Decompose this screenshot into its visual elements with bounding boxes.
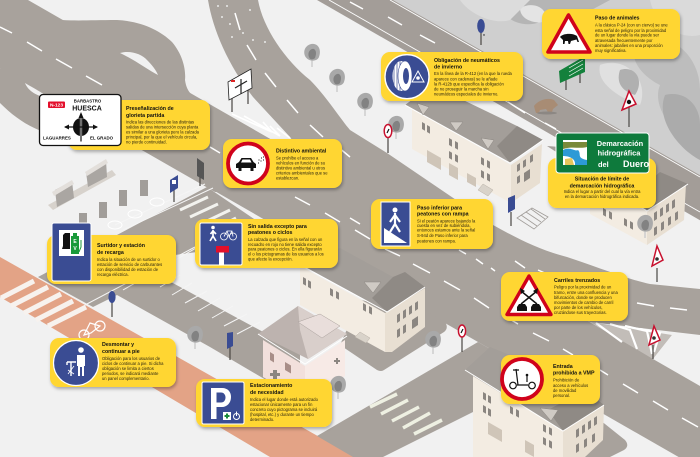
- heading and text: peatones con rampa.: [417, 238, 456, 243]
- blue rect sign: [508, 195, 515, 226]
- yellow background: [68, 100, 210, 150]
- card: preseñalización de glorieta partida: [40, 94, 210, 150]
- roundabout direction sign: N-123: [50, 102, 63, 108]
- back panel sign: [197, 158, 204, 186]
- heading and text: salidas de una intersección cuya planta: [126, 124, 199, 130]
- heading and text: Preseñalización de: [126, 106, 174, 112]
- heading and text: entonces estamos ante la señal: [417, 228, 475, 232]
- charging station: [48, 159, 164, 229]
- ev sign small: [170, 175, 178, 202]
- heading and text: principal, por la que el vehículo circula,: [126, 134, 197, 140]
- winter tyre sign: [385, 55, 429, 99]
- heading and text: bifurcación, donde se producen: [554, 295, 612, 300]
- crosswalks: [1, 197, 442, 434]
- heading and text: neumáticos especiales de invierno.: [434, 92, 498, 96]
- heading and text: [97, 243, 162, 277]
- yellow background: [381, 52, 523, 101]
- underpass sign: [381, 202, 410, 246]
- heading and text: Obligación de neumáticos: [434, 58, 500, 64]
- parking sign: [202, 382, 244, 424]
- chargers: [79, 180, 148, 225]
- heading and text: que afecte la excepción.: [248, 257, 293, 262]
- roundabout direction sign: LAGUARRES: [43, 136, 71, 140]
- heading and text: [102, 342, 164, 381]
- card: obligación de neumáticos de invierno: [381, 52, 523, 101]
- heading and text: atravesada frecuentemente por: [595, 38, 653, 43]
- building 4: [465, 347, 604, 457]
- green river basin sign: Demarcación: [597, 139, 644, 148]
- heading and text: En la línea de la R-412 (en la que la rueda: [434, 71, 513, 76]
- yellow background: [47, 235, 176, 284]
- heading and text: [248, 224, 324, 262]
- yellow background: [548, 158, 656, 208]
- heading and text: [564, 176, 641, 199]
- roundabout direction sign: BARBASTRO: [74, 98, 102, 104]
- heading and text: tramo, entre una confluencia y una: [554, 290, 618, 295]
- animal warning sign: [548, 15, 590, 52]
- dismount sign: [54, 340, 98, 386]
- roundabout direction sign: EL GRADO: [90, 136, 114, 140]
- heading and text: estacionar únicamente para un fin: [250, 402, 313, 407]
- card: estacionamiento de necesidad: [196, 379, 332, 427]
- heading and text: la R-412b que especifica la obligación: [434, 81, 504, 86]
- red ring sign 2: [458, 325, 466, 352]
- environmental sign: [228, 144, 268, 184]
- heading and text: Si el peatón aparece bajando la: [417, 218, 476, 224]
- heading and text: con disponibilidad de estación de: [97, 267, 159, 272]
- heading and text: vehículos en función de su: [276, 160, 326, 166]
- triangle sign animals: [622, 91, 636, 127]
- green river basin sign: hidrográfica: [598, 148, 641, 158]
- heading and text: La calzada que figura en la señal con un: [248, 237, 323, 242]
- blue parking sign small: [227, 332, 233, 360]
- building 3: [547, 146, 688, 245]
- heading and text: acceso a vehículos: [553, 383, 588, 388]
- building 1: [405, 85, 543, 203]
- bike lane bicycle marking: [79, 321, 105, 340]
- building 2: [295, 248, 425, 352]
- heading and text: Prohibición de: [553, 378, 580, 382]
- blue dismount sign small: [108, 291, 116, 317]
- green direction sign: [559, 56, 585, 90]
- heading and text: muy significativa.: [595, 48, 627, 53]
- heading and text: Distintivo ambiental: [276, 148, 327, 154]
- roundabout direction sign: [40, 94, 121, 146]
- upper loop ramp: [62, 20, 192, 95]
- heading and text: de necesidad: [250, 390, 284, 396]
- heading and text: peatones con rampa: [417, 212, 469, 218]
- orange bike lane: [0, 257, 355, 457]
- heading and text: [276, 148, 328, 180]
- heading and text: A la clásica P-24 (con un ciervo) se une: [595, 22, 668, 28]
- heading and text: establezcan.: [276, 176, 299, 180]
- heading and text: de recarga: [97, 250, 124, 256]
- curved road B with right branch: [208, 0, 700, 335]
- canopy island: [48, 170, 116, 210]
- charging station sign: [52, 223, 91, 281]
- yellow background: [371, 199, 493, 249]
- heading and text: no pierde continuidad.: [126, 140, 167, 144]
- red ring sign 1: [384, 124, 392, 153]
- yellow background: [196, 379, 332, 427]
- card: carriles trenzados: [501, 272, 628, 321]
- heading and text: de movilidad: [553, 388, 577, 393]
- heading and text: el o los pictogramas de los usuarios a los: [248, 252, 324, 257]
- heading and text: aparece con cadenas) se le añade: [434, 76, 498, 81]
- heading and text: Indica el lugar donde está autorizado: [250, 397, 319, 402]
- heading and text: por parte de los vehículos,: [554, 305, 603, 310]
- forest area: [393, 0, 700, 177]
- heading and text: peatones o ciclos: [248, 230, 293, 236]
- triangle sign 2: [652, 246, 663, 282]
- yellow background: [501, 272, 628, 321]
- bay markings: [108, 198, 164, 229]
- heading and text: Desmontar y: [102, 342, 134, 348]
- yellow background: [501, 355, 600, 404]
- heading and text: concreto cuyo pictograma se incluirá: [250, 407, 318, 412]
- heading and text: Indica el lugar a partir del cual la vía entra: [564, 189, 641, 194]
- heading and text: recuadro en rojo no tiene salida excepto: [248, 242, 322, 247]
- heading and text: Indica las direcciones de las distintas: [126, 120, 194, 124]
- road islands: [25, 52, 700, 386]
- heading and text: [553, 364, 595, 398]
- heading and text: Paso inferior para: [417, 206, 462, 212]
- yellow background: [542, 9, 680, 59]
- heading and text: personal.: [553, 393, 570, 398]
- heading and text: en la demarcación hidrográfica indicada.: [565, 194, 639, 199]
- dead end sign: [200, 223, 242, 265]
- heading and text: movimientos de cambio de carril: [554, 300, 613, 305]
- card: surtidor y estación de recarga: [47, 223, 176, 284]
- heading and text: obligación se limita a ciertos: [102, 366, 154, 371]
- heading and text: cuesta en vez de subiéndola,: [417, 223, 471, 228]
- yellow background: [195, 219, 338, 268]
- heading and text: Se prohíbe el acceso a: [276, 156, 319, 160]
- heading and text: Peligro por la proximidad de un: [554, 284, 612, 290]
- card: entrada prohibida a VMP: [501, 355, 600, 404]
- heading and text: prohibida a VMP: [553, 370, 595, 376]
- heading and text: estación de servicio de carburantes: [97, 262, 162, 267]
- trees: [187, 44, 653, 399]
- card: paso inferior para peatones con rampa: [371, 199, 493, 249]
- heading and text: determinado.: [250, 417, 274, 422]
- building plinths: [340, 300, 627, 457]
- yellow background: [223, 139, 342, 188]
- roundabout direction sign: HUESCA: [72, 106, 102, 112]
- heading and text: criterios ambientales que se: [276, 170, 328, 176]
- charging station sign: E: [73, 239, 77, 245]
- heading and text: periodos, se indicará mediante: [102, 371, 159, 376]
- heading and text: S-94d de Paso inferior para: [417, 233, 468, 238]
- heading and text: Paso de animales: [595, 16, 640, 22]
- heading and text: continuar a pie: [102, 349, 140, 355]
- heading and text: [554, 278, 618, 315]
- heading and text: demarcación hidrográfica: [570, 184, 634, 190]
- heading and text: Surtidor y estación: [97, 243, 145, 249]
- card: paso de animales: [542, 9, 680, 59]
- heading and text: glorieta partida: [126, 113, 164, 119]
- heading and text: [417, 206, 476, 243]
- card: sin salida excepto para peatones o ciclos: [195, 219, 338, 268]
- heading and text: esta señal de peligro por la proximidad: [595, 28, 667, 33]
- heading and text: de no proseguir la marcha sin: [434, 86, 489, 92]
- green river basin sign: Duero: [623, 159, 650, 169]
- charging station sign: V: [73, 246, 77, 252]
- heading and text: un panel complementario.: [102, 376, 150, 381]
- clinic building: [258, 306, 347, 402]
- heading and text: [434, 58, 513, 96]
- yellow background: [50, 338, 176, 387]
- heading and text: [595, 16, 668, 53]
- triangle sign 3: [649, 326, 660, 359]
- heading and text: animales: jabalíes en una proporción: [595, 43, 663, 48]
- lower ramp: [0, 68, 270, 192]
- heading and text: Estacionamiento: [250, 383, 293, 389]
- heading and text: Carriles trenzados: [554, 278, 600, 284]
- blue chain sign: [477, 19, 485, 45]
- weaving lanes warning sign: [507, 276, 551, 314]
- small road signs: [108, 19, 663, 360]
- boar on road: [534, 99, 558, 114]
- card: desmontar y continuar a pie: [50, 338, 176, 387]
- heading and text: de invierno: [434, 64, 463, 70]
- heading and text: Indica la situación de un surtidor o: [97, 257, 161, 262]
- side road and parking: [38, 187, 300, 400]
- heading and text: Obligación para los usuarios de: [102, 356, 161, 361]
- heading and text: de un lugar donde la vía puede ser: [595, 32, 660, 38]
- white dots near forest road: [217, 5, 266, 43]
- card: distintivo ambiental: [223, 139, 342, 188]
- preview panel sign: [228, 69, 252, 112]
- lower crossing road: [317, 342, 541, 457]
- highway C: [317, 0, 700, 226]
- heading and text: recarga eléctrica.: [97, 272, 129, 277]
- heading and text: es similar a una glorieta pero la calzada: [126, 130, 200, 134]
- heading and text: distintivo ambiental u otros: [276, 166, 325, 170]
- heading and text: ciclos de continuar a pie. Si dicha: [102, 361, 164, 366]
- heading and text: Situación de límite de: [575, 176, 629, 182]
- heading and text: (hospital, etc.) y durante un tiempo: [250, 412, 314, 417]
- heading and text: cruzándose sus trayectorias.: [554, 310, 607, 315]
- heading and text: [250, 383, 319, 422]
- scooter prohibition sign: [502, 359, 542, 399]
- bicycle parking grid: [517, 208, 548, 229]
- card: situación de límite de demarcación hidrográfica: [548, 133, 656, 208]
- heading and text: [126, 106, 200, 144]
- green river basin sign: del: [598, 160, 609, 169]
- heading and text: para peatones o ciclos. En ella figurarán: [248, 247, 323, 252]
- heading and text: Entrada: [553, 364, 573, 370]
- heading and text: Sin salida excepto para: [248, 224, 307, 230]
- green river basin sign: [556, 133, 650, 173]
